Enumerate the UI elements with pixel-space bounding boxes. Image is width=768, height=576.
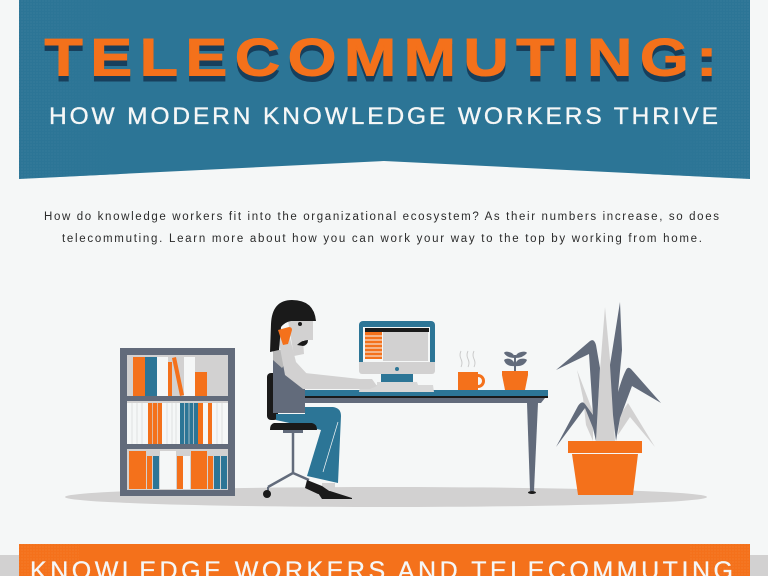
desk xyxy=(305,390,548,494)
hair xyxy=(270,300,316,352)
person on the phone xyxy=(263,300,377,499)
bottom gray strip xyxy=(0,555,768,576)
title: TELECOMMUTING: xyxy=(44,29,717,87)
icon: small potted plant xyxy=(502,352,528,390)
phone xyxy=(278,327,292,345)
intro text: How do knowledge workers fit into the organizational ecosystem? As their numbers increase, so does xyxy=(44,211,719,223)
shoes xyxy=(305,480,352,499)
bottom shelf books xyxy=(129,451,227,489)
subtitle: HOW MODERN KNOWLEDGE WORKERS THRIVE xyxy=(49,103,718,130)
chair xyxy=(263,373,309,498)
icon: steaming coffee mug xyxy=(458,351,484,390)
legs xyxy=(276,407,341,483)
intro text: telecommuting. Learn more about how you can work your way to the top by working from home. xyxy=(62,233,702,245)
section banner: knowledge workers and telecommuting xyxy=(19,544,750,576)
header banner xyxy=(19,0,750,179)
top shelf books xyxy=(133,357,207,396)
chair seat xyxy=(270,423,317,433)
floor shadow xyxy=(65,487,707,507)
icon: large potted plant xyxy=(556,302,661,495)
torso xyxy=(273,358,305,413)
title: TELECOMMUTING: xyxy=(44,34,717,93)
icon: computer monitor xyxy=(359,321,435,392)
face xyxy=(288,321,313,356)
middle shelf books xyxy=(127,403,228,444)
intro text xyxy=(44,211,719,245)
icon: bookshelf xyxy=(120,348,235,496)
arm xyxy=(278,334,377,389)
